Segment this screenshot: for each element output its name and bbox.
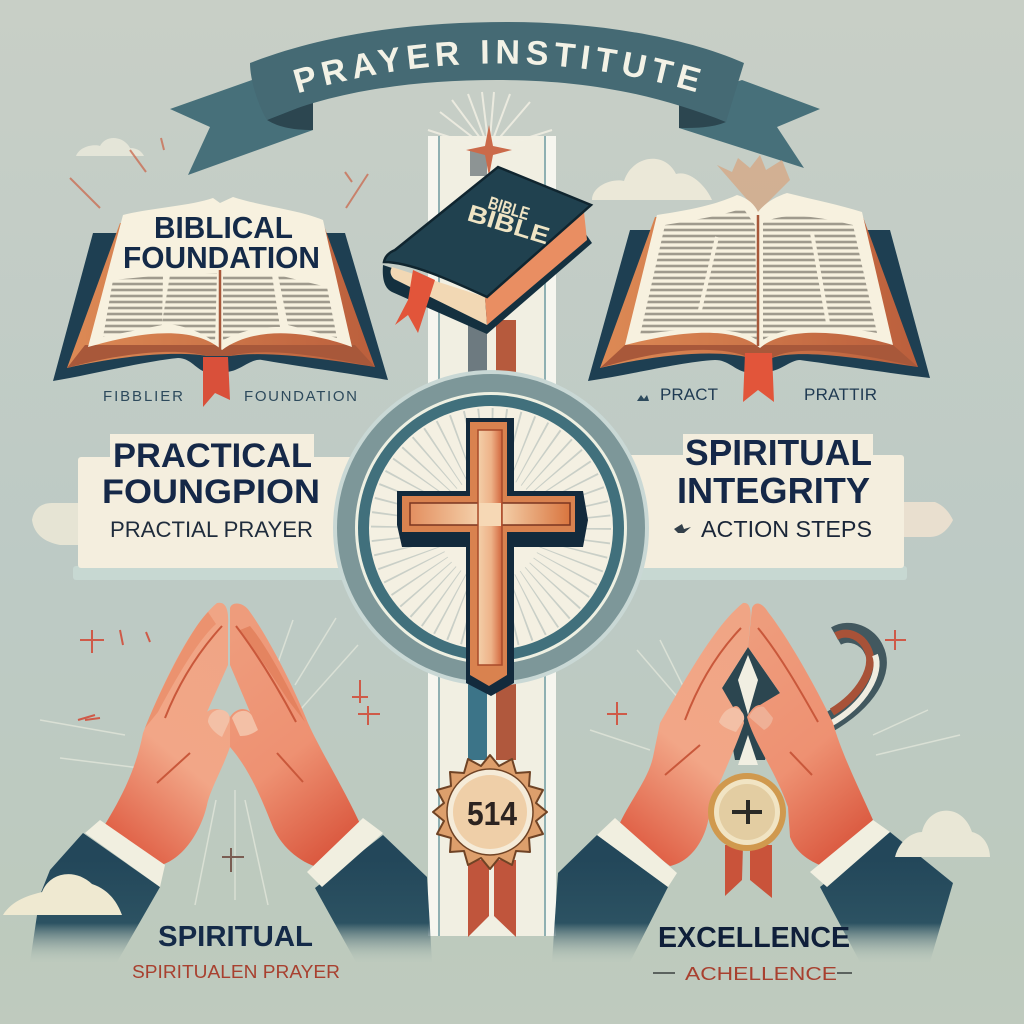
bookmark xyxy=(743,353,774,402)
page xyxy=(625,193,893,348)
medal ribbon left xyxy=(725,845,743,896)
left hand xyxy=(618,603,751,866)
right praying hands xyxy=(552,603,953,962)
left sleeve xyxy=(30,833,160,962)
cross bevel vertical xyxy=(478,430,502,665)
right book glow xyxy=(717,155,790,212)
left cuff xyxy=(597,818,677,887)
heading: SPIRITUAL xyxy=(685,432,872,473)
left open book xyxy=(53,197,388,407)
page edges xyxy=(67,223,375,368)
bottom page block xyxy=(67,345,375,368)
ribbon white centre xyxy=(738,655,758,765)
cross shadow xyxy=(397,418,588,696)
bookmark xyxy=(203,357,230,407)
finger creases xyxy=(157,626,303,783)
ribbon behind hands xyxy=(722,647,780,760)
cover xyxy=(53,233,388,381)
heading: PRACTICAL xyxy=(113,437,312,475)
finger creases xyxy=(665,628,818,775)
badge number: 514 xyxy=(467,795,518,832)
spiritual caption: SPIRITUALEN PRAYER xyxy=(132,962,340,982)
banner body xyxy=(250,22,744,122)
cloud top left xyxy=(76,138,144,156)
title: PRAYER INSTITUTE xyxy=(293,40,701,93)
subheading: ACTION STEPS xyxy=(701,516,872,542)
right sleeve xyxy=(820,832,953,962)
ribbon loop outer band xyxy=(826,633,877,724)
rosette badge xyxy=(433,755,547,869)
right sleeve xyxy=(315,835,432,962)
page xyxy=(88,197,352,350)
banner left fold xyxy=(267,102,313,130)
excellence caption: ACHELLENCE xyxy=(685,964,837,984)
cloud bottom right xyxy=(895,811,990,857)
panel stub xyxy=(32,503,78,545)
left panel xyxy=(32,434,373,580)
lower ribbon tails xyxy=(468,860,489,937)
medal xyxy=(708,773,786,851)
right book caption mark xyxy=(637,395,649,401)
page gutters xyxy=(700,233,828,323)
right hand xyxy=(230,603,362,868)
panel base xyxy=(620,566,907,580)
panel base xyxy=(73,566,373,580)
bible title second line: BIBLE xyxy=(464,200,552,250)
banner right tail xyxy=(679,80,820,168)
small thin cross xyxy=(222,848,244,872)
left thumb nail xyxy=(208,710,230,737)
excellence caption: EXCELLENCE xyxy=(658,922,850,954)
lower stripes xyxy=(468,680,487,760)
center bible xyxy=(383,167,592,334)
bullet icon xyxy=(674,524,691,533)
subheading: PRACTIAL PRAYER xyxy=(110,517,313,542)
page text xyxy=(103,273,337,343)
medal cross xyxy=(732,800,762,824)
cross centre xyxy=(479,503,501,526)
right panel xyxy=(620,432,953,580)
left panel: FOUNGPION xyxy=(102,473,320,511)
ribbon loop red band xyxy=(832,634,870,712)
spiritual caption: SPIRITUAL xyxy=(158,921,313,953)
right cuff xyxy=(810,820,890,887)
cloud bottom left xyxy=(3,874,122,915)
heading: BIBLICAL xyxy=(154,210,293,245)
page edges xyxy=(600,217,918,368)
star and rays above ribbon xyxy=(428,92,552,176)
vertical ribbon xyxy=(428,136,556,937)
right open book xyxy=(588,193,930,402)
panel face xyxy=(620,455,904,568)
spine xyxy=(757,215,759,346)
heading backing xyxy=(683,434,873,458)
right book caption right: PRATTIR xyxy=(804,385,877,404)
cover xyxy=(588,230,930,381)
decorative sparks xyxy=(70,138,368,208)
cover xyxy=(384,167,591,297)
central medallion xyxy=(333,370,649,696)
sunburst rays xyxy=(405,442,577,614)
cross outer xyxy=(402,422,575,686)
spine xyxy=(219,270,221,352)
page text xyxy=(640,208,877,340)
bottom page block xyxy=(600,345,918,368)
right thumb nail xyxy=(232,711,258,736)
page side xyxy=(391,267,487,325)
banner left tail xyxy=(170,80,313,175)
outer finger shading left xyxy=(145,612,216,728)
left book caption right: FOUNDATION xyxy=(244,388,357,405)
right hand xyxy=(747,603,873,868)
small red crosses right xyxy=(607,630,906,725)
right thumb nail xyxy=(749,707,773,730)
medal ribbon right xyxy=(750,845,772,898)
right book caption left: PRACT xyxy=(660,385,718,404)
left cuff xyxy=(85,820,165,887)
right panel: INTEGRITY xyxy=(677,470,870,511)
upper stripes xyxy=(468,320,487,372)
left praying hands xyxy=(30,603,432,962)
cloud top right xyxy=(592,159,712,200)
heading backing xyxy=(110,434,314,458)
ribbon loop white band xyxy=(830,655,877,724)
banner right fold xyxy=(679,102,726,128)
outer finger shading right xyxy=(240,626,305,722)
cross bevel horizontal xyxy=(410,503,570,525)
right cuff xyxy=(307,818,383,887)
left book caption left: FIBBLIER xyxy=(103,388,183,405)
spiritual caption xyxy=(132,921,340,982)
page fore edge xyxy=(485,203,587,325)
left open book: FOUNDATION xyxy=(123,240,320,275)
bookmark xyxy=(395,270,435,333)
left thumb nail xyxy=(719,708,744,732)
left hand xyxy=(104,603,230,866)
excellence caption xyxy=(653,922,852,984)
bottom cover xyxy=(383,230,592,334)
small red crosses left xyxy=(78,630,380,725)
panel face xyxy=(78,457,368,568)
banner xyxy=(170,22,820,175)
left sleeve xyxy=(552,835,668,962)
bible title: BIBLE xyxy=(486,193,532,224)
panel stub xyxy=(900,502,953,537)
radiating light lines xyxy=(40,618,960,905)
